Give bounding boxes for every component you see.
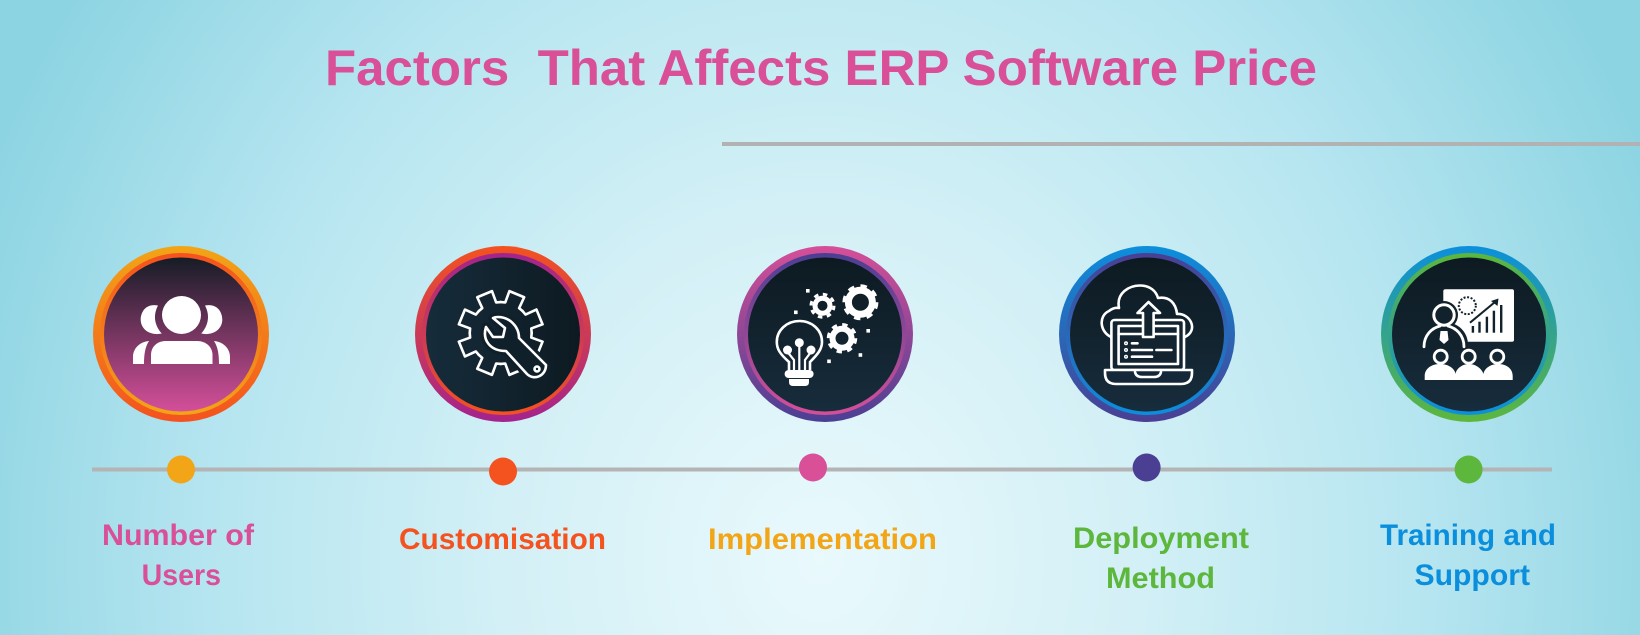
label: number of users: Number of — [102, 519, 255, 552]
icon: gear and wrench — [457, 290, 546, 377]
label: number of users: Users — [142, 559, 221, 592]
timeline dot 4 — [1133, 454, 1161, 482]
timeline dot 1 — [167, 456, 195, 484]
timeline dot 2 — [489, 458, 517, 486]
badge: customisation — [415, 246, 591, 422]
label: implementation: Implementation — [708, 523, 937, 556]
label: deployment method — [1073, 522, 1249, 595]
timeline — [92, 454, 1552, 486]
title: Factors That Affects ERP Software Price — [325, 40, 1317, 96]
badge: deployment method — [1059, 246, 1235, 422]
label: number of users — [102, 519, 255, 592]
label: training and support: Support — [1414, 559, 1530, 592]
top divider line — [722, 142, 1640, 146]
label: training and support: Training and — [1380, 519, 1556, 552]
label: deployment method: Deployment — [1073, 522, 1249, 555]
badge: training and support — [1381, 246, 1557, 422]
icon: light bulb and gears — [777, 286, 876, 386]
label: training and support — [1380, 519, 1556, 592]
icon: presenter with chart and audience — [1420, 289, 1514, 380]
timeline dot 3 — [799, 454, 827, 482]
icon: users — [133, 296, 230, 364]
timeline dot 5 — [1455, 456, 1483, 484]
label: deployment method: Method — [1106, 562, 1215, 595]
label: customisation: Customisation — [399, 523, 606, 556]
badge: number of users — [93, 246, 269, 422]
badge: implementation — [737, 246, 913, 422]
icon: cloud laptop — [1102, 286, 1192, 384]
